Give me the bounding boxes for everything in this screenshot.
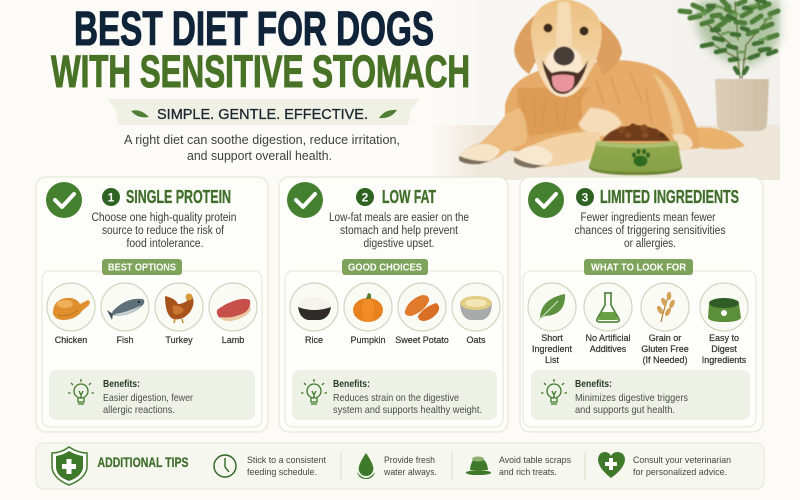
icon: check badge	[287, 182, 323, 218]
number badge 3	[576, 188, 594, 206]
number badge 1: 1	[108, 190, 115, 204]
benefits text: Minimizes digestive triggers	[575, 392, 688, 404]
panel: low fat	[279, 177, 508, 432]
eyes	[544, 24, 552, 32]
benefits text	[103, 379, 193, 416]
nose	[554, 46, 574, 66]
icon: bulb	[541, 379, 567, 404]
option: no artificial additives: No Artificial	[585, 333, 631, 343]
description	[574, 212, 726, 250]
description: chances of triggering sensitivities	[574, 225, 726, 237]
benefits text	[333, 379, 482, 416]
fur strands	[522, 72, 652, 126]
intro text: A right diet can soothe digestion, reduce irritation,	[124, 132, 400, 147]
tagline ribbon	[107, 99, 420, 125]
tagline text: SIMPLE. GENTLE. EFFECTIVE.	[157, 106, 368, 123]
option: short ingredient list	[528, 283, 576, 365]
benefits text: Reduces strain on the digestive	[333, 392, 459, 404]
dog body	[505, 60, 700, 160]
benefits box	[531, 370, 750, 420]
benefits text: and supports gut health.	[575, 404, 675, 416]
tip: fresh water: Provide fresh	[384, 455, 435, 466]
kibble	[602, 124, 670, 141]
number badge 2: 2	[362, 190, 369, 204]
flank highlight	[652, 72, 684, 138]
options box	[42, 271, 262, 427]
options box	[285, 271, 503, 427]
option: pumpkin: Pumpkin	[350, 335, 386, 345]
icon: right leaf	[379, 110, 397, 118]
tip: feeding schedule: Stick to a consistent	[247, 455, 326, 466]
number badge 3: 3	[582, 190, 589, 204]
tip: table scraps: and rich treats.	[499, 467, 557, 478]
icon: clock	[214, 455, 236, 477]
option: grain or gluten free: Grain or	[649, 333, 681, 343]
icon: water drop	[357, 453, 375, 479]
icon: shield	[52, 447, 87, 485]
option: easy to digest ingredients: Easy to	[709, 333, 739, 343]
option: fish: Fish	[116, 335, 134, 345]
mouth	[542, 60, 588, 94]
panel: additional tips	[36, 443, 764, 489]
label: best options: BEST OPTIONS	[108, 262, 176, 274]
icon: bowl	[466, 456, 491, 475]
back paw	[672, 134, 693, 150]
label: what to look for	[584, 259, 693, 275]
description: digestive upset.	[364, 238, 434, 250]
heading: LIMITED INGREDIENTS	[600, 187, 739, 207]
description: Fewer ingredients mean fewer	[580, 212, 716, 224]
option: short ingredient list: Ingredient	[532, 344, 573, 354]
tip: feeding schedule: feeding schedule.	[247, 467, 317, 478]
description: food intolerance.	[126, 238, 204, 250]
tip: table scraps	[499, 455, 571, 478]
floor	[430, 125, 780, 180]
icon: left leaf	[131, 110, 149, 117]
label: good choices: GOOD CHOICES	[348, 262, 422, 274]
option: no artificial additives	[584, 283, 632, 354]
benefits box	[292, 370, 497, 420]
icon: heart	[598, 452, 625, 478]
option: oats	[452, 283, 500, 345]
panel: single protein	[36, 177, 268, 432]
tip: feeding schedule	[247, 455, 326, 478]
tip: fresh water: water always.	[383, 467, 437, 478]
heading: ADDITIONAL TIPS	[98, 454, 188, 470]
number badge 2	[356, 188, 374, 206]
benefits box	[49, 370, 255, 420]
option: chicken: Chicken	[55, 335, 87, 345]
description	[329, 212, 469, 250]
option: fish	[101, 283, 149, 345]
description: source to reduce the risk of	[102, 225, 225, 237]
option: easy to digest ingredients: Ingredients	[702, 355, 747, 365]
tip: consult veterinarian: Consult your veterinarian	[633, 455, 731, 466]
tongue	[552, 74, 574, 92]
benefits text: system and supports healthy weight.	[333, 404, 482, 416]
ears	[514, 15, 542, 74]
heading: LOW FAT	[382, 187, 436, 207]
option: grain or gluten free	[641, 283, 689, 365]
option: grain or gluten free: (If Needed)	[642, 355, 688, 365]
muzzle	[545, 46, 583, 86]
label: what to look for: WHAT TO LOOK FOR	[591, 262, 687, 274]
option: no artificial additives: Additives	[590, 344, 627, 354]
option: sweet potato	[395, 283, 449, 345]
tip: consult veterinarian: for personalized advice.	[633, 467, 727, 478]
option: grain or gluten free: Gluten Free	[641, 344, 689, 354]
label: good choices	[342, 259, 428, 275]
benefits text: Easier digestion, fewer	[103, 392, 193, 404]
hero photo: golden retriever with bowl	[430, 0, 780, 180]
option: lamb	[209, 283, 257, 345]
panel: limited ingredients	[520, 177, 763, 432]
description: Choose one high-quality protein	[92, 212, 236, 224]
chest shading	[518, 88, 590, 136]
benefits text: Benefits:	[333, 379, 370, 390]
option: easy to digest ingredients: Digest	[711, 344, 737, 354]
tip: table scraps: Avoid table scraps	[499, 455, 571, 466]
benefits text: Benefits:	[575, 379, 612, 390]
number badge 1	[102, 188, 120, 206]
option: pumpkin	[344, 283, 392, 345]
benefits text	[575, 379, 688, 416]
option: lamb: Lamb	[222, 335, 244, 345]
title line 1: BEST DIET FOR DOGS	[74, 3, 434, 56]
option: oats: Oats	[466, 335, 486, 345]
intro text	[124, 132, 400, 163]
forehead blaze	[556, 1, 572, 46]
label: best options	[102, 259, 182, 275]
icon: bulb	[301, 379, 327, 404]
description: or allergies.	[624, 238, 676, 250]
intro text: and support overall health.	[187, 148, 332, 163]
option: rice	[290, 283, 338, 345]
icon: check badge	[528, 182, 564, 218]
chest highlight	[578, 108, 622, 136]
plant	[680, 0, 779, 78]
paw print	[632, 149, 650, 166]
description: stomach and help prevent	[340, 225, 459, 237]
dog tail	[695, 127, 745, 149]
heading: SINGLE PROTEIN	[126, 187, 231, 207]
option: rice: Rice	[305, 335, 323, 345]
dog left leg	[458, 108, 527, 164]
option: turkey: Turkey	[165, 335, 193, 345]
icon: bulb	[68, 379, 94, 404]
option: short ingredient list: Short	[541, 333, 563, 343]
option: short ingredient list: List	[545, 355, 559, 365]
description	[92, 212, 236, 250]
head	[531, 0, 602, 97]
option: easy to digest ingredients	[700, 283, 748, 365]
options box	[523, 271, 756, 427]
title	[51, 3, 470, 97]
title line 2: WITH SENSITIVE STOMACH	[51, 46, 470, 97]
food bowl	[589, 124, 682, 175]
option: turkey	[155, 283, 203, 345]
tip: fresh water	[383, 455, 437, 478]
description: Low-fat meals are easier on the	[329, 212, 469, 224]
dog	[458, 0, 745, 168]
icon: check badge	[46, 182, 82, 218]
dog right leg	[513, 132, 600, 168]
wall	[430, 0, 780, 126]
benefits text: Benefits:	[103, 379, 140, 390]
option: sweet potato: Sweet Potato	[395, 335, 449, 345]
benefits text: allergic reactions.	[103, 404, 175, 416]
plant pot	[715, 79, 769, 131]
tip: consult veterinarian	[633, 455, 731, 478]
option: chicken	[47, 283, 95, 345]
